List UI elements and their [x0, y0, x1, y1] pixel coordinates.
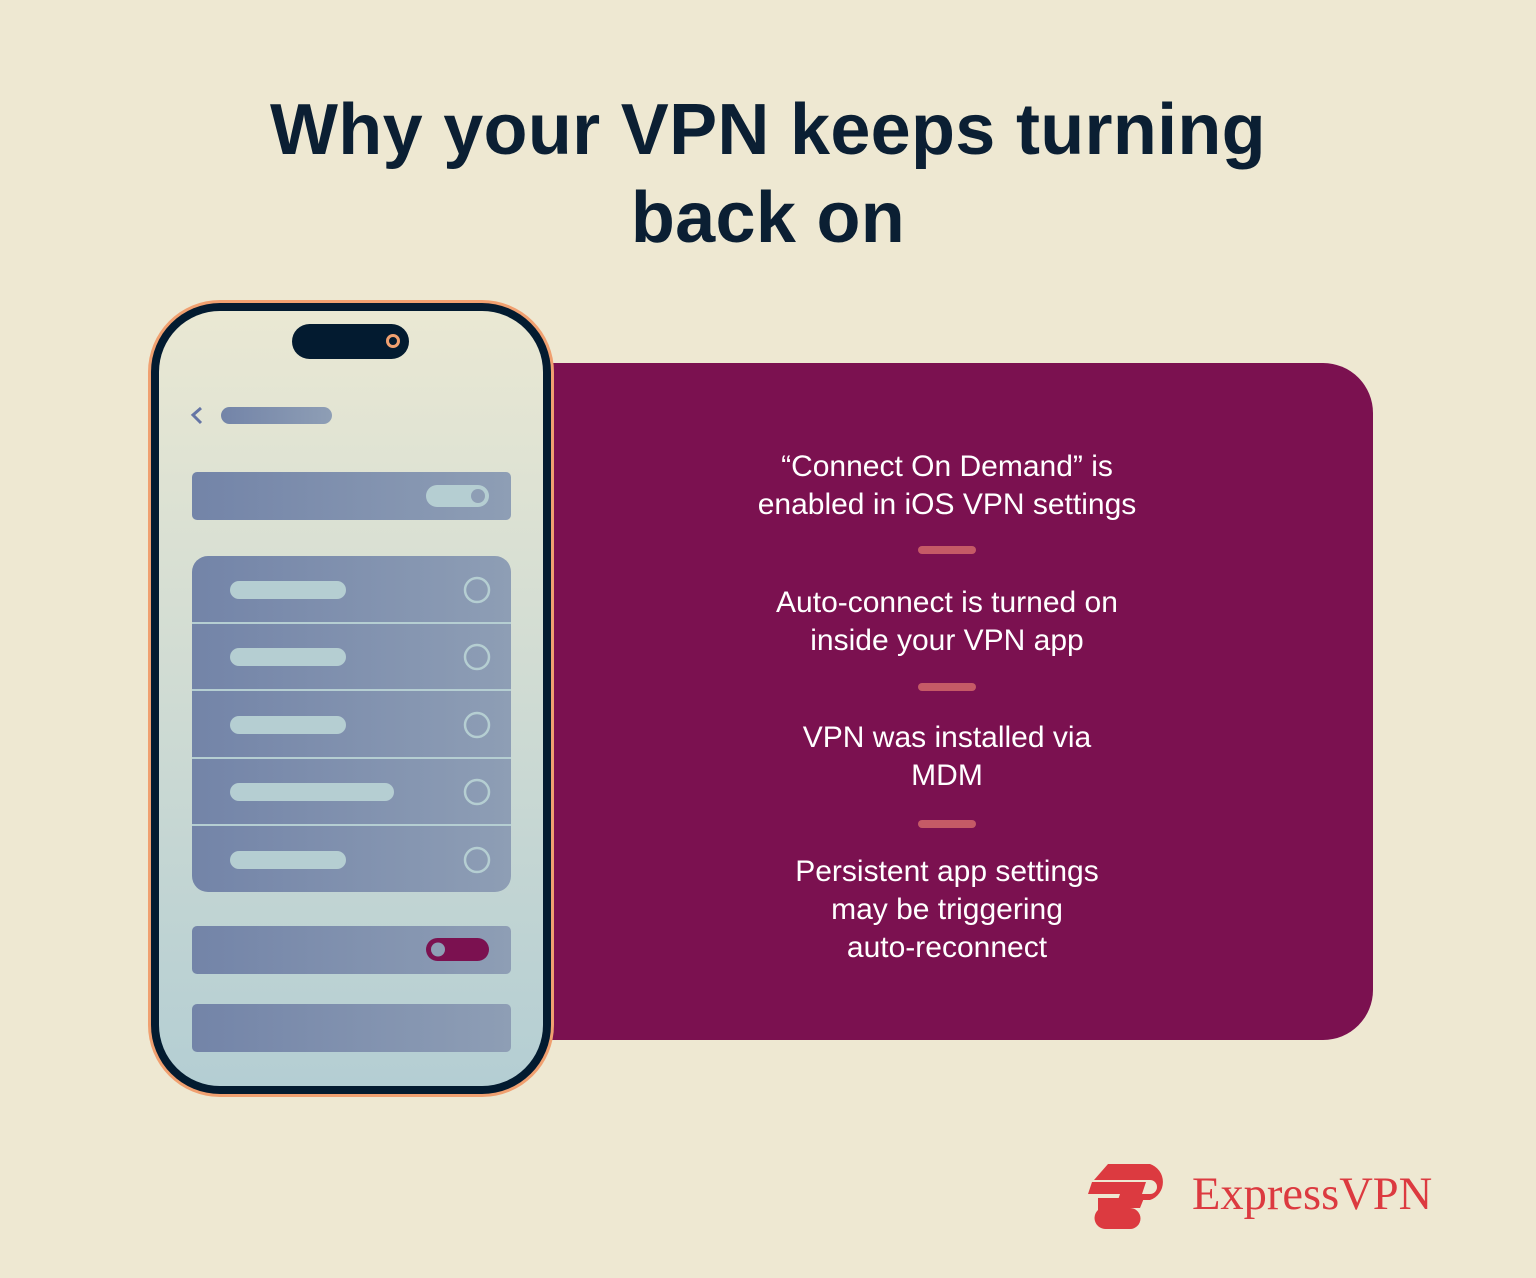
row bottom: [192, 1004, 511, 1052]
text: reason 3: VPN was installed via: [803, 721, 1091, 754]
logo text: ExpressVPN: [1192, 1169, 1432, 1220]
toggle row top: [192, 472, 511, 520]
list group: [192, 556, 511, 892]
divider 3: [918, 820, 976, 828]
text: reason 2: Auto-connect is turned on: [776, 586, 1118, 619]
logo icon: [1088, 1164, 1163, 1229]
text: reason 1: [758, 450, 1136, 521]
text: reason 2: inside your VPN app: [810, 624, 1084, 657]
divider 1: [918, 546, 976, 554]
text: reason 1: “Connect On Demand” is: [781, 450, 1113, 483]
phone illustration: [148, 300, 554, 1097]
toggle row bottom: [192, 926, 511, 974]
title: back on: [631, 178, 905, 258]
text: reason 4: may be triggering: [831, 893, 1063, 926]
panel: reasons: [540, 363, 1373, 1040]
icon: back chevron: [193, 408, 201, 423]
icon: camera notch: [292, 324, 409, 359]
text: reason 4: auto-reconnect: [847, 931, 1047, 964]
text: reason 3: MDM: [911, 759, 983, 792]
text: reason 4: Persistent app settings: [795, 855, 1099, 888]
text: reason 2: [776, 586, 1118, 657]
title: Why your VPN keeps turning: [270, 90, 1266, 170]
text: reason 4: [795, 855, 1099, 964]
divider 2: [918, 683, 976, 691]
text: reason 1: enabled in iOS VPN settings: [758, 488, 1136, 521]
title: [270, 90, 1266, 258]
text: reason 3: [802, 721, 1092, 792]
